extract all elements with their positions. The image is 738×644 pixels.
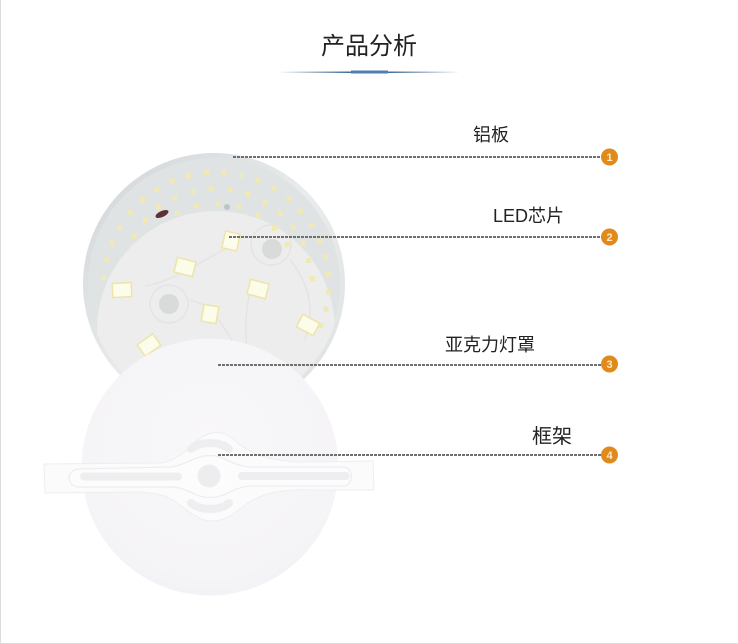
callout 4: frame [218, 425, 618, 464]
callout 2: LED chip: 2 [606, 232, 613, 244]
translucent inner plate [97, 211, 334, 376]
acrylic lamp cover [82, 338, 338, 596]
upper curved slot [191, 443, 229, 449]
callout 2: LED chip [229, 206, 618, 246]
solder mark [154, 208, 170, 220]
title underline [278, 70, 460, 74]
screw [224, 204, 230, 210]
callout 4: frame: 框架 [532, 425, 572, 448]
mounting holes [159, 294, 179, 314]
callout 1: aluminium board: 1 [606, 152, 613, 164]
outer rim [83, 153, 345, 415]
aluminium board [88, 158, 340, 410]
callout 3: acrylic cover: 3 [606, 359, 613, 371]
lower curved slot [191, 503, 229, 509]
callout 3: acrylic cover: 亚克力灯罩 [445, 335, 535, 355]
callout 1: aluminium board: 铝板 [473, 125, 509, 145]
small LED dots [101, 170, 331, 328]
callout 1: aluminium board [233, 125, 618, 166]
callout 2: LED chip: LED芯片 [493, 206, 564, 226]
bracket inner ridge [69, 456, 352, 498]
mounting bracket [44, 433, 374, 521]
callout 3: acrylic cover [218, 335, 618, 372]
left slot [80, 472, 182, 480]
centre hub [198, 464, 220, 488]
right slot [238, 472, 350, 480]
lamp back plate with LEDs [83, 153, 345, 379]
callout 4: frame: 4 [606, 450, 613, 462]
title: 产品分析 [321, 33, 417, 60]
large LED chips [112, 231, 320, 356]
